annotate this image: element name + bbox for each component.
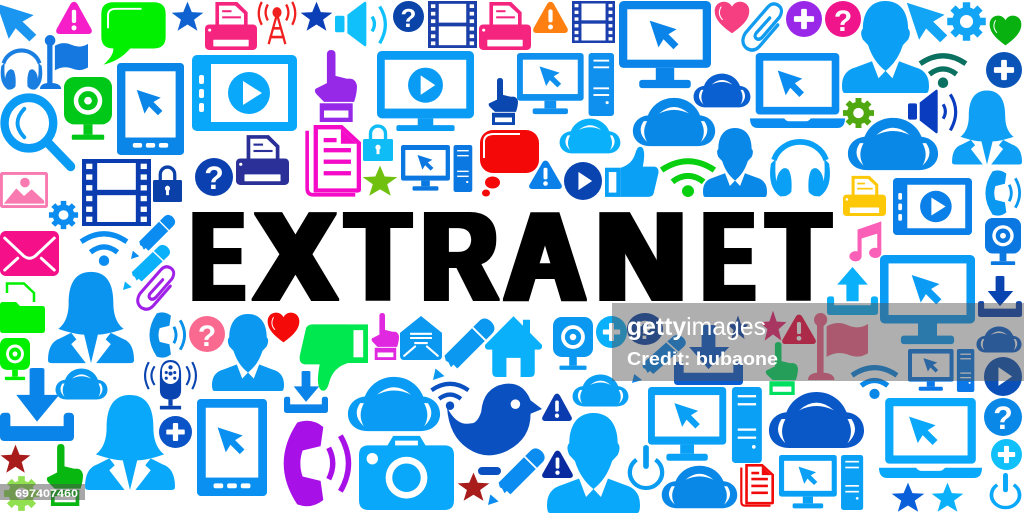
icon: cloud (348, 377, 440, 431)
icon: purple clip (138, 267, 174, 309)
icon: question pink (189, 316, 225, 353)
icon: blue phone (149, 312, 185, 358)
icon: phone (985, 170, 1020, 216)
icon: play button (984, 357, 1022, 396)
icon: wifi (432, 384, 468, 410)
icon: light plus (596, 316, 627, 348)
icon: power (991, 475, 1020, 508)
icon: small film strip (572, 1, 615, 43)
icon: magenta hand (372, 313, 399, 360)
icon: webcam (985, 218, 1021, 265)
icon: cursor (0, 4, 36, 41)
icon: pink star (760, 311, 786, 341)
icon: blue gear (49, 201, 78, 229)
icon: question blue (195, 158, 233, 196)
icon: question under watermark: ? (637, 315, 653, 345)
icon: paper clip (743, 4, 781, 50)
icon: star (172, 2, 203, 31)
icon: headphones (770, 142, 830, 196)
icon: purple plus (786, 1, 822, 37)
title: T (347, 185, 409, 327)
icon: man (212, 314, 284, 391)
icon: desktop pc (517, 53, 614, 116)
icon: green star (363, 166, 397, 196)
icon: light cloud (560, 119, 620, 153)
icon: desktop pc (908, 349, 974, 392)
icon: question under watermark (627, 313, 663, 345)
icon: thumbs up (605, 147, 659, 197)
icon: dark large cloud (769, 392, 864, 448)
icon: purple hand (315, 50, 357, 122)
icon: small download (284, 371, 328, 413)
icon: cyan plus (991, 439, 1022, 470)
icon: purple phone (284, 421, 348, 506)
icon: open envelope (400, 316, 442, 360)
icon: big download (0, 368, 74, 441)
icon: large film strip (82, 159, 151, 226)
image id tag: 697407460 (15, 488, 78, 500)
icon: dark star (727, 316, 749, 339)
icon: cloud (56, 369, 107, 399)
icon: blue plus (159, 416, 192, 448)
icon: pink printer (205, 2, 257, 50)
icon: green hand (47, 444, 83, 506)
icon: cloud (633, 98, 715, 146)
icon: tablet with cursor (197, 399, 267, 496)
icon: green wifi (662, 161, 714, 197)
watermark panel (612, 303, 1024, 381)
icon: yellow printer (843, 176, 886, 216)
icon: alert magenta (56, 2, 92, 34)
icon: dark cloud (694, 74, 750, 107)
watermark logo text: gettyimages (627, 313, 766, 341)
icon: blue plus (986, 52, 1022, 88)
icon: question magenta: ? (834, 5, 852, 38)
icon: green speech bubble (101, 2, 166, 65)
icon: camera (359, 436, 454, 510)
icon: question blue (984, 398, 1022, 436)
icon: cyan lock (363, 126, 393, 161)
icon: download large (674, 325, 743, 385)
icon: large cloud (848, 118, 938, 170)
icon: pink envelope (0, 231, 59, 276)
icon: light pencil (123, 245, 170, 290)
icon: woman (952, 91, 1022, 164)
icon: lime webcam (0, 338, 30, 380)
icon: alert orange (533, 2, 568, 33)
icon: blue hand (489, 78, 518, 125)
icon: green hand (766, 342, 798, 395)
icon: navy printer (236, 135, 289, 185)
icon: gear (947, 2, 986, 41)
icon: laptop (750, 53, 845, 128)
icon: red heart (268, 313, 299, 342)
icon: bar under bird (478, 467, 501, 475)
icon: thumbs down (300, 324, 368, 391)
icon: headphones (1, 50, 42, 90)
icon: alert blue (529, 161, 562, 189)
title: E (703, 185, 753, 327)
icon: light star (932, 483, 963, 512)
icon: magenta documents (307, 125, 361, 195)
icon: red antenna tower (259, 2, 295, 44)
icon: green folder (0, 284, 45, 333)
icon: magnifying glass (5, 98, 71, 166)
icon: pencil (131, 215, 175, 259)
icon: landscape tablet with play (192, 55, 297, 131)
icon: large woman (85, 395, 175, 490)
icon: pencil (433, 319, 494, 380)
icon: wifi (81, 234, 127, 266)
icon: red document (741, 464, 774, 506)
icon: microphone (145, 360, 196, 409)
icon: cloud (573, 375, 628, 406)
icon: speaker (335, 2, 385, 46)
icon: dark cloud (976, 326, 1022, 353)
title: X (255, 185, 335, 327)
title: E (192, 185, 243, 327)
icon: music note (849, 221, 881, 261)
icon: desktop pc (779, 455, 863, 510)
icon: pink printer (479, 2, 531, 50)
icon: pink flag (808, 313, 868, 380)
icon: green heart (990, 16, 1021, 45)
icon: large monitor with cursor (880, 255, 975, 344)
icon: question magenta (825, 1, 861, 38)
icon: desktop pc (401, 145, 472, 192)
icon: landscape tablet with play (893, 178, 972, 235)
icon: question pink: ? (198, 320, 216, 353)
icon: blue flag (40, 35, 88, 89)
icon: woman (48, 272, 134, 363)
icon: pink heart (715, 2, 749, 33)
icon: dark speaker (908, 90, 956, 133)
icon: power (630, 448, 662, 488)
icon: lime gear (4, 476, 39, 511)
icon: question blue: ? (204, 160, 224, 196)
image id tag (0, 484, 85, 500)
title: R (422, 185, 497, 327)
icon: red star (458, 473, 489, 501)
icon: monitor with play (377, 51, 474, 131)
icon: wifi (852, 368, 897, 399)
icon: question blue: ? (993, 400, 1013, 436)
icon: large man (547, 413, 640, 513)
icon: navy alert (542, 394, 572, 421)
icon: house (485, 316, 542, 377)
icon: blue star (892, 483, 924, 512)
icon: large desktop pc (648, 387, 762, 463)
icon: green gear (843, 98, 874, 128)
icon: cloud (662, 466, 737, 508)
icon: pencil under watermark (632, 335, 686, 383)
title: N (596, 185, 686, 327)
icon: large laptop (879, 398, 982, 478)
icon: red thought bubble (480, 130, 539, 196)
icon: pencil (488, 448, 545, 505)
icon: monitor with cursor (619, 1, 711, 88)
icon: question dark: ? (401, 3, 416, 33)
title: A (505, 185, 585, 327)
icon: question dark (393, 1, 424, 33)
icon: film strip (428, 1, 477, 48)
icon: tablet with cursor (117, 63, 184, 155)
icon: man (842, 1, 929, 93)
icon: upload (827, 267, 878, 315)
icon: red star (1, 445, 30, 473)
icon: navy lock (153, 167, 182, 202)
icon: teal wifi (920, 56, 966, 88)
icon: pink picture (0, 172, 48, 208)
icon: man (703, 128, 767, 197)
icon: navy alert (542, 451, 573, 478)
icon: bird (447, 384, 542, 455)
title: T (768, 185, 829, 327)
icon: dark star (301, 2, 332, 31)
icon: green webcam (64, 77, 112, 140)
icon: red alert (782, 315, 816, 344)
icon: dark play button (564, 162, 602, 200)
icon: webcam (553, 317, 593, 370)
icon: dark download (978, 276, 1022, 317)
icon: cursor (907, 3, 947, 42)
watermark credit: Credit: bubaone (627, 349, 778, 369)
